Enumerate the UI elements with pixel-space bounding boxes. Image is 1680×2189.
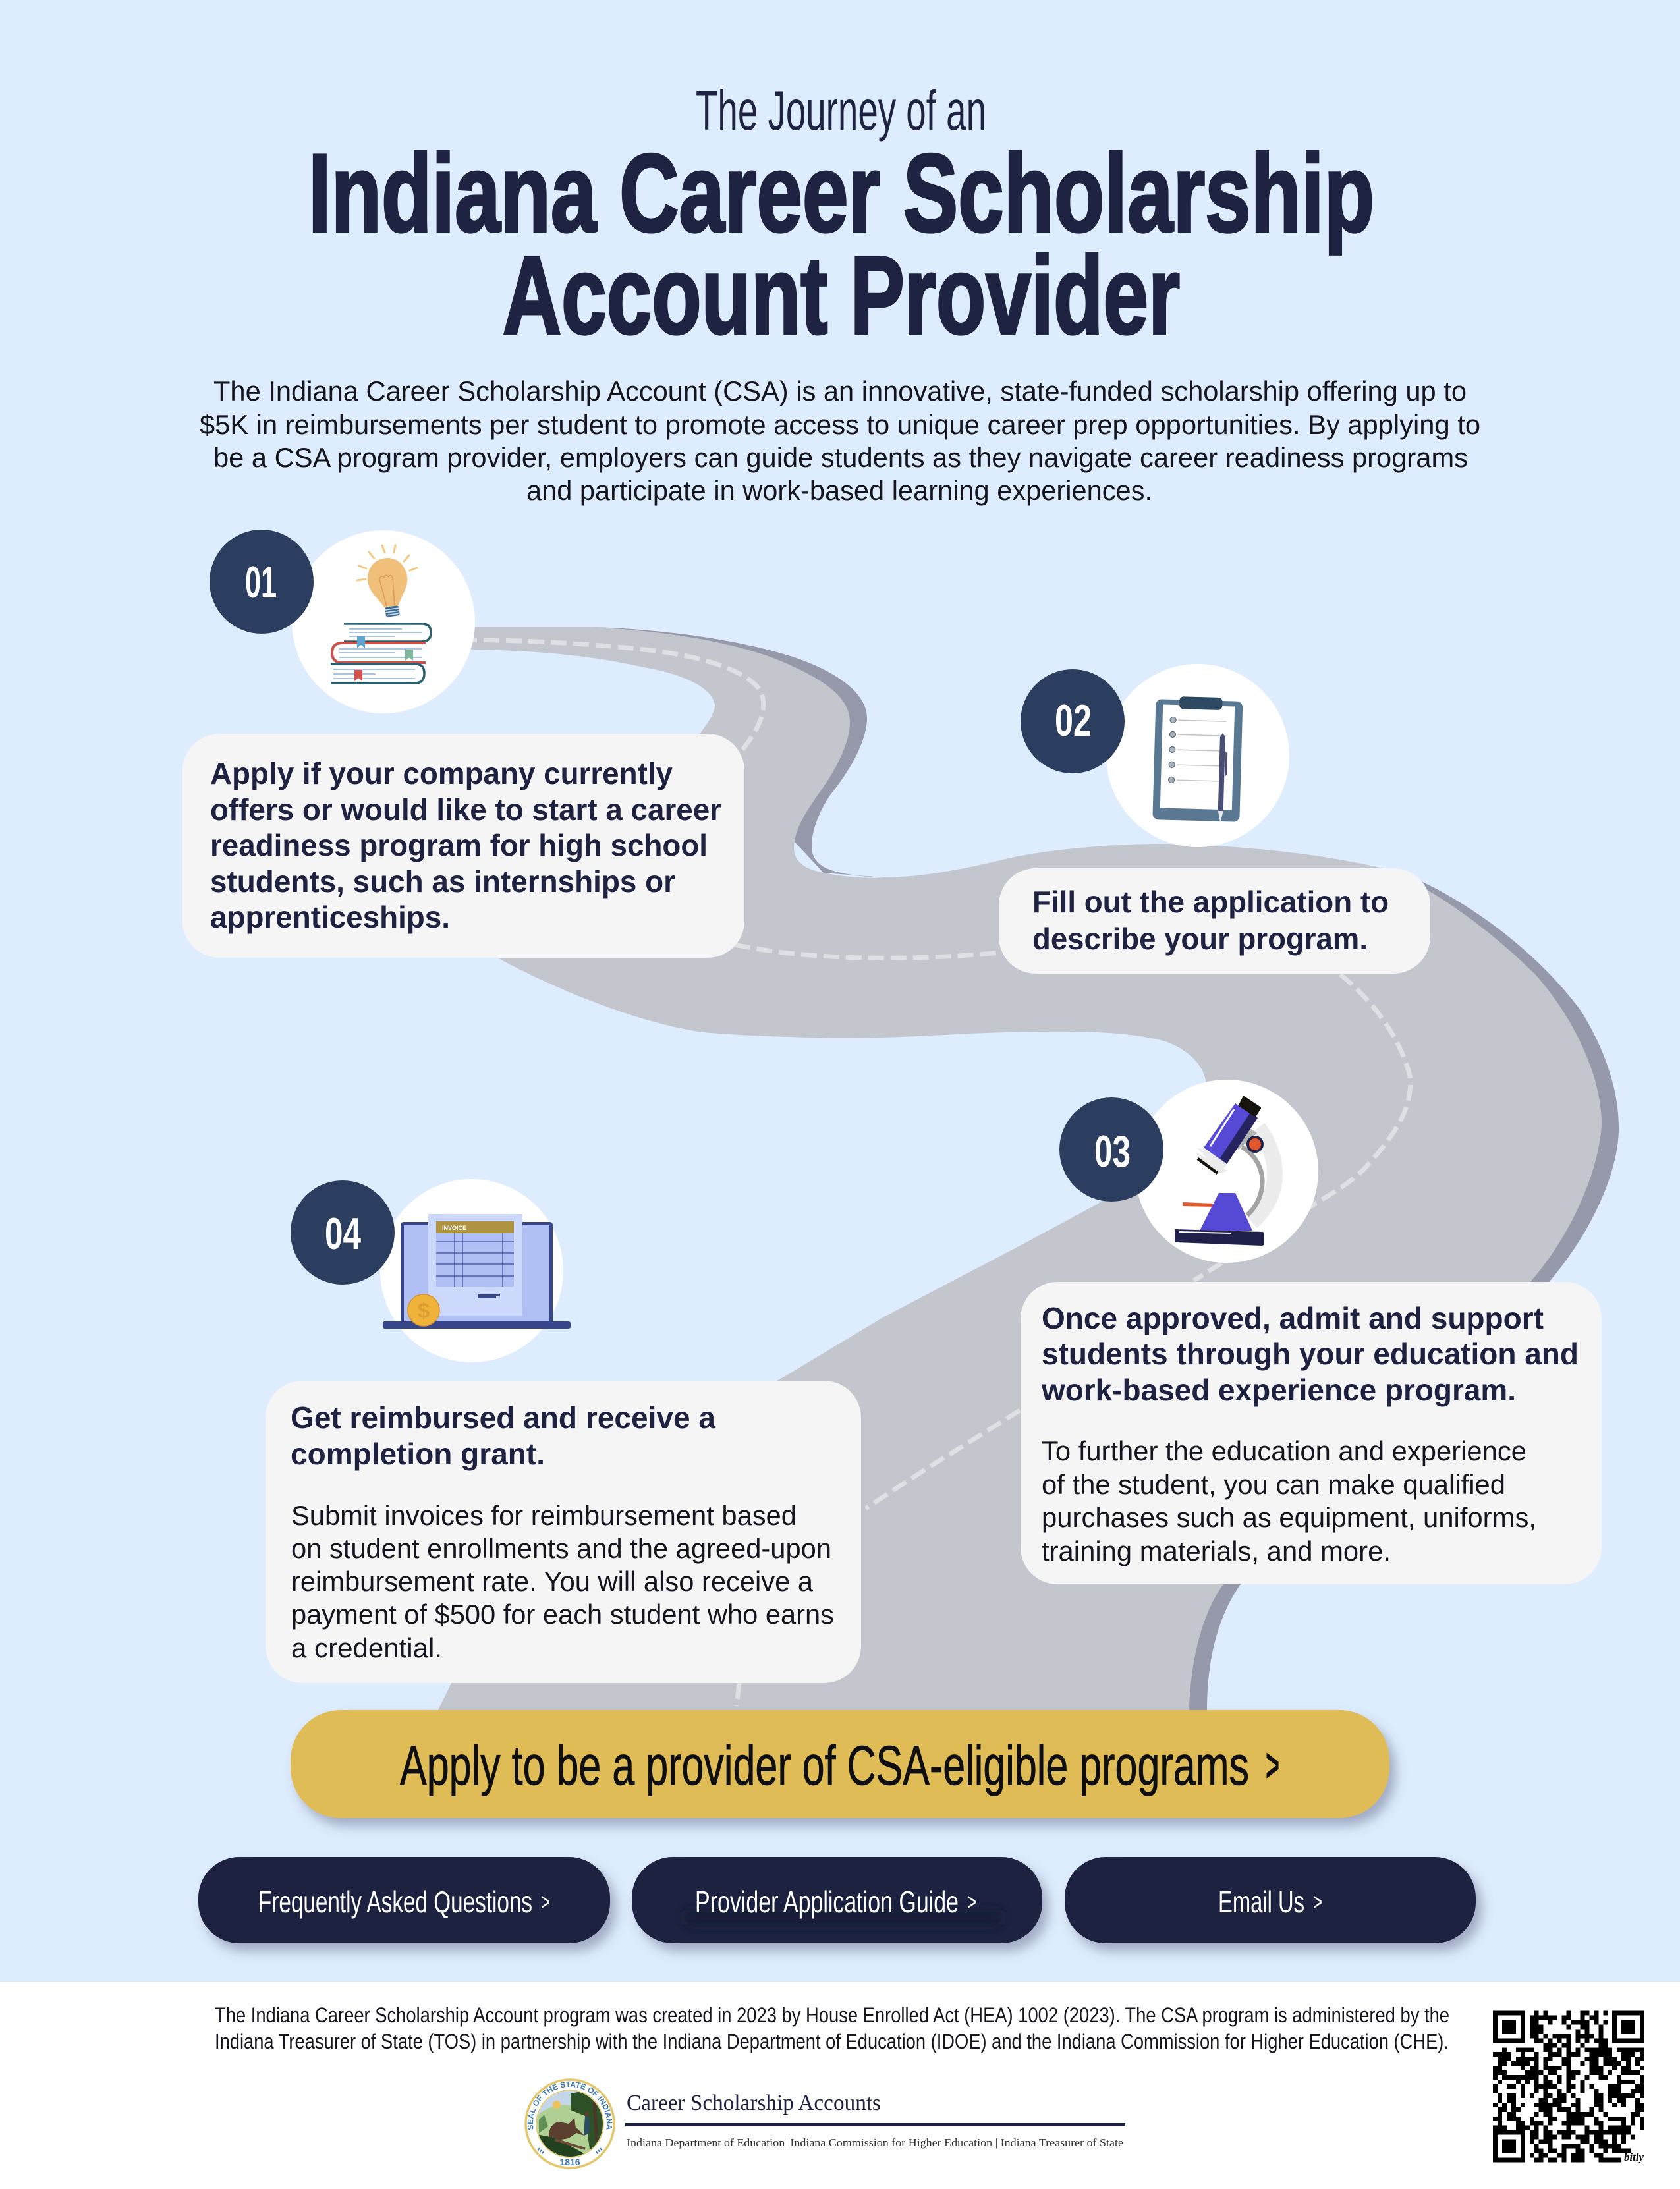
- step 01 text box: readiness program for high school: [210, 828, 708, 862]
- step 03 text box: work-based experience program.: [1041, 1373, 1516, 1407]
- step 03 number badge: [1059, 1097, 1163, 1202]
- button: provider application guide: >: [967, 1889, 976, 1916]
- step 03 number badge: 03: [1094, 1126, 1131, 1177]
- title: the journey of an: The Journey of an: [696, 80, 986, 142]
- step 04 text box: payment of $500 for each student who earns: [291, 1599, 834, 1630]
- step 02 number badge: 02: [1055, 696, 1092, 746]
- footer text: Indiana Treasurer of State (TOS) in partnership with the Indiana Department of Education (IDOE) and the Indiana Commission for Higher Education (CHE).: [215, 2030, 1449, 2053]
- step 04 text box: on student enrollments and the agreed-upon: [291, 1533, 831, 1564]
- button: frequently asked questions: [198, 1857, 610, 1943]
- intro paragraph: be a CSA program provider, employers can guide students as they navigate career readiness programs: [213, 442, 1468, 473]
- call to action button: Apply to be a provider of CSA-eligible programs: [400, 1734, 1249, 1796]
- step 03 text box: training materials, and more.: [1042, 1536, 1391, 1566]
- step 04 text box: Submit invoices for reimbursement based: [291, 1500, 797, 1531]
- QR bitly mark: bitly: [1624, 2151, 1644, 2163]
- step 01 text box: offers or would like to start a career: [210, 792, 721, 827]
- road edge shadow: first bend: [593, 627, 883, 877]
- icon: laptop with invoice and coin: [383, 1214, 571, 1329]
- step 01 number badge: 01: [245, 557, 277, 607]
- step 02 text box: [999, 868, 1430, 974]
- step 02 text box: Fill out the application to: [1032, 885, 1389, 919]
- step 03 text box: of the student, you can make qualified: [1042, 1469, 1505, 1500]
- intro paragraph: and participate in work-based learning experiences.: [526, 475, 1152, 506]
- step 04 text box: [266, 1381, 861, 1683]
- step 04 number badge: 04: [325, 1209, 361, 1259]
- footer logotype: [625, 2091, 1125, 2149]
- step 01: [182, 530, 744, 958]
- step 01 text box: students, such as internships or: [210, 864, 675, 899]
- road center dashes: [461, 640, 1411, 1706]
- road surface: [438, 627, 1602, 1710]
- step 04 text box: a credential.: [291, 1632, 442, 1663]
- step 03 icon circle: [1135, 1080, 1318, 1263]
- step 03 text box: students through your education and: [1042, 1337, 1579, 1371]
- button: provider application guide: Provider Application Guide: [695, 1885, 959, 1919]
- call to action button: [291, 1710, 1389, 1818]
- icon: laptop with invoice and coin: $: [418, 1298, 430, 1323]
- call to action button: >: [1266, 1739, 1279, 1792]
- button: email us: Email Us: [1218, 1885, 1304, 1919]
- step 02 icon circle: [1106, 664, 1289, 847]
- button: provider application guide: [632, 1857, 1042, 1943]
- footer text: The Indiana Career Scholarship Account program was created in 2023 by House Enrolled Act (HEA) 1002 (2023). The CSA program is administered by the: [215, 2003, 1449, 2027]
- step 03 text box: [1021, 1282, 1602, 1584]
- icon: state seal: 1816: [559, 2157, 580, 2167]
- step 02: [999, 664, 1430, 974]
- icon: laptop with invoice and coin: INVOICE: [442, 1225, 466, 1231]
- icon: clipboard: [1152, 696, 1243, 823]
- step 02 text box: describe your program.: [1032, 922, 1368, 956]
- step 04 text box: reimbursement rate. You will also receive a: [291, 1566, 814, 1597]
- step 03 text box: purchases such as equipment, uniforms,: [1042, 1502, 1536, 1533]
- title: Indiana Career Scholarship Account Provider: [308, 131, 1374, 357]
- step 01 icon circle: [292, 530, 475, 713]
- footer band: [0, 1982, 1680, 2189]
- road edge shadow: right bend: [1189, 873, 1619, 1710]
- step 04 number badge: [291, 1180, 395, 1285]
- icon: light bulb: [357, 545, 417, 619]
- footer logotype: Career Scholarship Accounts: [627, 2091, 881, 2115]
- step 03 text box: Once approved, admit and support: [1042, 1301, 1544, 1335]
- step 02 number badge: [1021, 669, 1125, 773]
- intro paragraph: The Indiana Career Scholarship Account (CSA) is an innovative, state-funded scholarship offering up to: [213, 375, 1467, 406]
- footer logotype: Indiana Department of Education |Indiana Commission for Higher Education | Indiana Treasurer of State: [627, 2136, 1123, 2149]
- step 01 text box: apprenticeships.: [210, 900, 450, 934]
- title: Indiana Career Scholarship Account Provider: Account Provider: [503, 233, 1180, 357]
- icon: stack of books: [331, 624, 431, 683]
- step 04 icon circle: [380, 1179, 563, 1362]
- intro paragraph: [200, 375, 1480, 506]
- intro paragraph: $5K in reimbursements per student to promote access to unique career prep opportunities. By applying to: [200, 409, 1480, 440]
- step 04: [266, 1179, 861, 1683]
- QR code: [1493, 2010, 1644, 2162]
- road: [438, 627, 1619, 1710]
- step 04 text box: completion grant.: [291, 1437, 545, 1471]
- step 01 text box: [182, 734, 744, 958]
- step 01 text box: Apply if your company currently: [210, 756, 673, 790]
- step 03: [1021, 1080, 1602, 1584]
- button: frequently asked questions: >: [541, 1889, 550, 1916]
- button: frequently asked questions: Frequently Asked Questions: [258, 1885, 532, 1919]
- icon: state seal: [524, 2078, 615, 2169]
- icon: state seal: SEAL OF THE STATE OF INDIANA: [527, 2082, 613, 2130]
- button: email us: [1065, 1857, 1476, 1943]
- icon: microscope: [1175, 1097, 1275, 1246]
- step 03 text box: To further the education and experience: [1042, 1435, 1526, 1466]
- step 01 number badge: [210, 530, 314, 634]
- step 04 text box: Get reimbursed and receive a: [291, 1400, 715, 1435]
- button: email us: >: [1313, 1889, 1322, 1916]
- footer text: [215, 2003, 1449, 2053]
